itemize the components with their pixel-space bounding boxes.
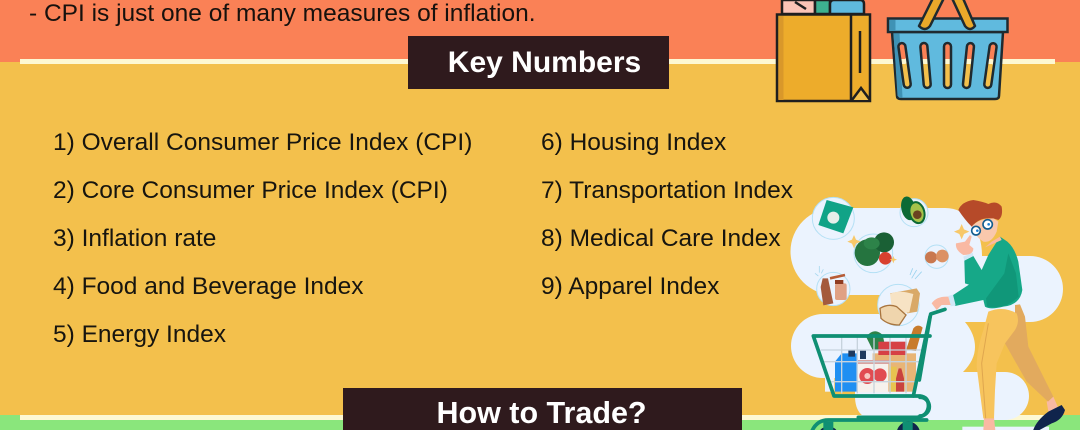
- cart wheels: [818, 422, 920, 430]
- icon: shopping basket: [888, 0, 1008, 99]
- shopper glasses: [972, 220, 992, 235]
- illustration: pale blue background blob: [790, 208, 1063, 420]
- cart frame: [812, 317, 930, 430]
- list: key numbers column 2: 6) Housing Index: [541, 129, 726, 156]
- icon: avocado: [899, 195, 928, 227]
- shopper shoe: [1033, 405, 1065, 430]
- intro text line: - CPI is just one of many measures of inflation.: [29, 0, 536, 27]
- shopper neck: [985, 237, 1002, 247]
- list: key numbers column 2: [541, 129, 793, 300]
- shopper trousers front leg: [977, 309, 1018, 418]
- icon: jars: [815, 266, 850, 306]
- shopper sweater: [952, 237, 1022, 308]
- shopper face: [972, 218, 998, 242]
- illustration: food circles: [812, 195, 928, 326]
- list: key numbers column 2: 9) Apparel Index: [541, 273, 719, 300]
- list: key numbers column 1: 3) Inflation rate: [53, 225, 216, 252]
- illustration: shopping cart: [812, 317, 930, 430]
- icon: sparkle: [954, 224, 969, 239]
- icon: bread: [878, 284, 920, 326]
- shopper ankles: [983, 397, 1058, 430]
- heading: Key Numbers: Key Numbers: [448, 46, 641, 79]
- heading: How to Trade?: [343, 388, 742, 430]
- orange top band: [0, 0, 1080, 62]
- shopper hair: [958, 200, 1002, 227]
- green bottom band: [0, 415, 1080, 430]
- heading: Key Numbers: [408, 36, 669, 89]
- icon: leafy greens with tomato: [847, 232, 897, 273]
- sole strip: [962, 427, 1049, 430]
- list: key numbers column 2: 8) Medical Care Index: [541, 225, 781, 252]
- list: key numbers column 1: 1) Overall Consumer Price Index (CPI): [53, 129, 472, 156]
- heading: How to Trade?: How to Trade?: [436, 396, 647, 430]
- cart wire mesh: [821, 337, 922, 393]
- cart handle and front ring: [919, 309, 945, 416]
- list: key numbers column 1: [53, 129, 472, 348]
- shopper cuffs: [948, 253, 973, 306]
- illustration: shopper: [919, 200, 1065, 430]
- icon: grocery bag: [777, 0, 870, 101]
- list: key numbers column 1: 5) Energy Index: [53, 321, 226, 348]
- list: key numbers column 1: 4) Food and Beverage Index: [53, 273, 364, 300]
- icon: packet: [812, 197, 854, 239]
- shopper hands: [932, 235, 973, 310]
- list: key numbers column 2: 7) Transportation Index: [541, 177, 793, 204]
- list: key numbers column 1: 2) Core Consumer Price Index (CPI): [53, 177, 448, 204]
- icon: eggs: [925, 245, 949, 268]
- cart contents: [825, 326, 923, 392]
- shopper trousers back leg: [1005, 304, 1053, 402]
